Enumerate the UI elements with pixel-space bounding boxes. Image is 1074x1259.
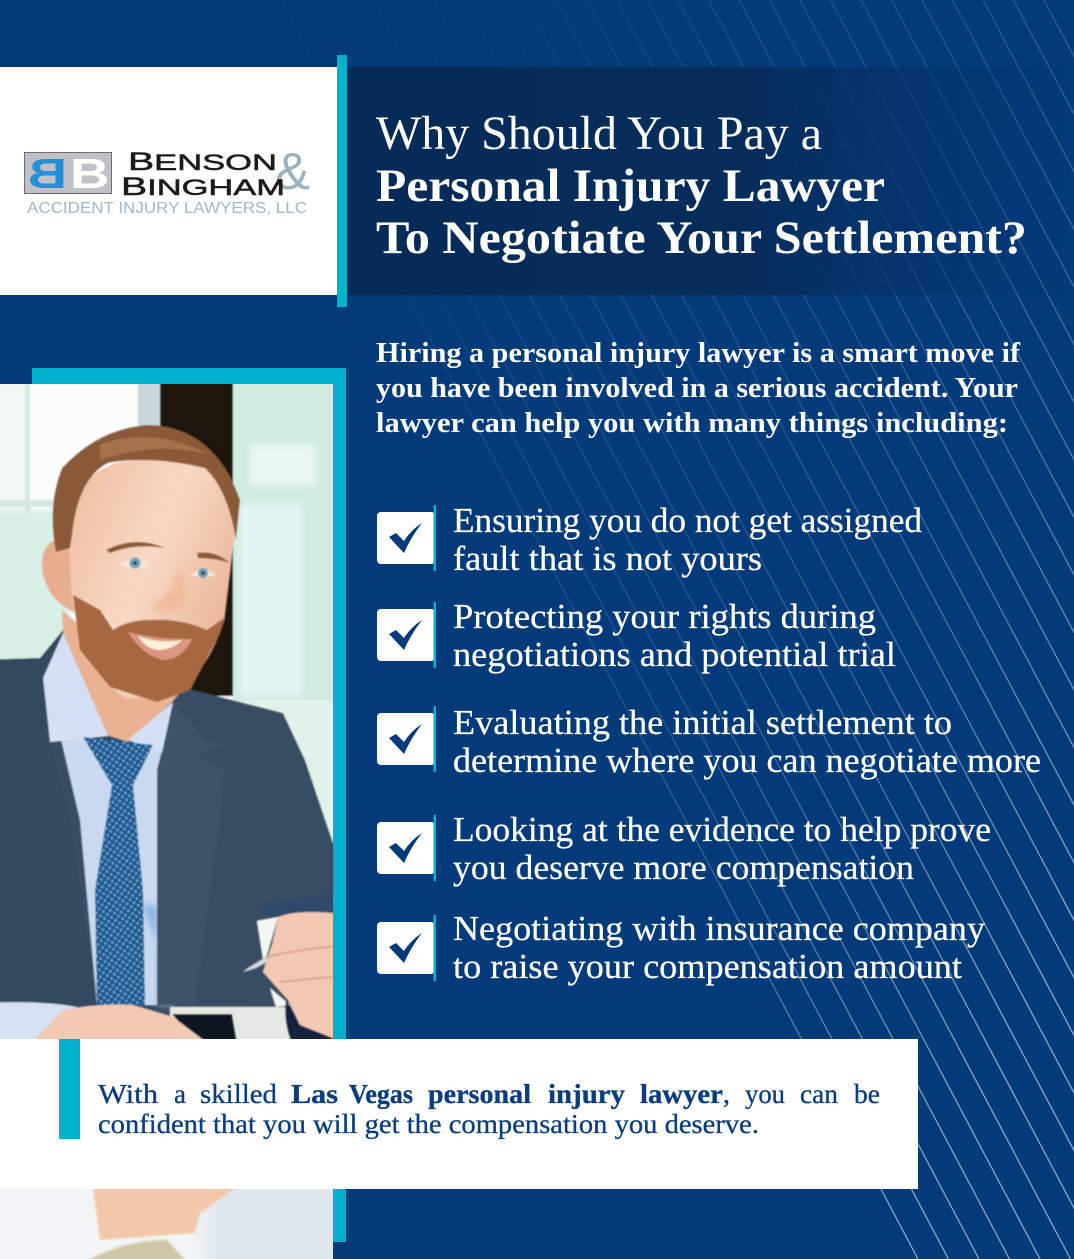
item 5: Negotiating with insurance company <box>453 909 986 948</box>
callout accent bar <box>59 1039 80 1139</box>
photo: smiling lawyer in suit <box>0 384 333 1039</box>
photo bottom strip: handshake <box>0 1189 333 1259</box>
logo tagline: ACCIDENT INJURY LAWYERS, LLC <box>27 200 307 217</box>
callout text: lawyer, <box>640 1079 730 1109</box>
callout text: personal <box>428 1079 532 1109</box>
face <box>68 460 235 698</box>
callout text: can <box>800 1079 839 1109</box>
logo panel <box>0 67 337 295</box>
item 3: determine where you can negotiate more <box>453 741 1041 780</box>
callout text: be <box>854 1079 880 1109</box>
collar <box>43 633 173 753</box>
callout text <box>98 1079 880 1139</box>
callout text: a <box>174 1079 186 1109</box>
checklist <box>377 501 1041 986</box>
item 2: negotiations and potential trial <box>453 635 896 674</box>
left hand <box>34 1003 205 1039</box>
table and tablet <box>168 1000 333 1039</box>
neck <box>62 610 190 742</box>
item 1: Ensuring you do not get assigned <box>453 501 922 540</box>
eyebrows <box>106 542 165 553</box>
ear <box>42 538 78 614</box>
item 5: to raise your compensation amount <box>453 947 962 986</box>
item 2: Protecting your rights during <box>453 597 876 636</box>
gap between sleeve and hand <box>257 917 290 1007</box>
callout text: Las <box>291 1079 338 1109</box>
nose <box>152 570 186 613</box>
mouth <box>128 632 192 660</box>
logo name: Bingham: B INGHAM <box>121 173 285 201</box>
intro paragraph: Hiring a personal injury lawyer is a smart move if <box>376 338 1021 369</box>
tie <box>83 737 153 1007</box>
lapels <box>156 904 177 1006</box>
hair <box>53 425 240 552</box>
beard <box>73 595 224 702</box>
jacket <box>0 630 333 1025</box>
item 1: fault that is not yours <box>453 539 762 578</box>
item 3 <box>377 703 1041 780</box>
item 4: you deserve more compensation <box>453 848 914 887</box>
callout text: injury <box>548 1079 626 1109</box>
callout text: confident that you will get the compensation you deserve. <box>98 1109 759 1139</box>
icon: BB logo mark <box>24 151 112 197</box>
photo background: office windows <box>0 384 333 844</box>
item 5 <box>377 909 986 986</box>
title: Why Should You Pay a <box>376 107 822 160</box>
item 4: Looking at the evidence to help prove <box>453 810 991 849</box>
shirt cuff <box>0 1000 78 1039</box>
shirt <box>60 735 162 1005</box>
item 2 <box>377 597 896 674</box>
callout <box>0 1039 918 1189</box>
eyes <box>120 558 216 578</box>
logo name: Benson: B ENSON <box>128 148 277 176</box>
item 3: Evaluating the initial settlement to <box>453 703 952 742</box>
item 1 <box>377 501 922 578</box>
title: To Negotiate Your Settlement? <box>376 212 1027 264</box>
diagonal line pattern <box>251 0 1074 1259</box>
icon: BB logo mark: B <box>70 151 109 197</box>
intro paragraph: you have been involved in a serious accident. Your <box>376 373 1018 404</box>
icon: BB logo mark: B <box>28 151 67 197</box>
intro paragraph: lawyer can help you with many things including: <box>376 408 1008 439</box>
intro paragraph <box>376 338 1021 439</box>
teal header accent bar <box>337 55 347 307</box>
item 4 <box>377 810 991 887</box>
callout text: With <box>98 1079 159 1109</box>
teal photo frame <box>32 368 346 1242</box>
head <box>42 425 240 702</box>
title <box>376 107 1027 264</box>
title band <box>347 67 1074 295</box>
callout text: skilled <box>200 1079 278 1109</box>
title: Personal Injury Lawyer <box>376 160 885 212</box>
logo ampersand: & <box>275 143 310 201</box>
hand with pen <box>242 910 333 1039</box>
callout text: Vegas <box>349 1079 413 1109</box>
callout text: you <box>745 1079 785 1109</box>
